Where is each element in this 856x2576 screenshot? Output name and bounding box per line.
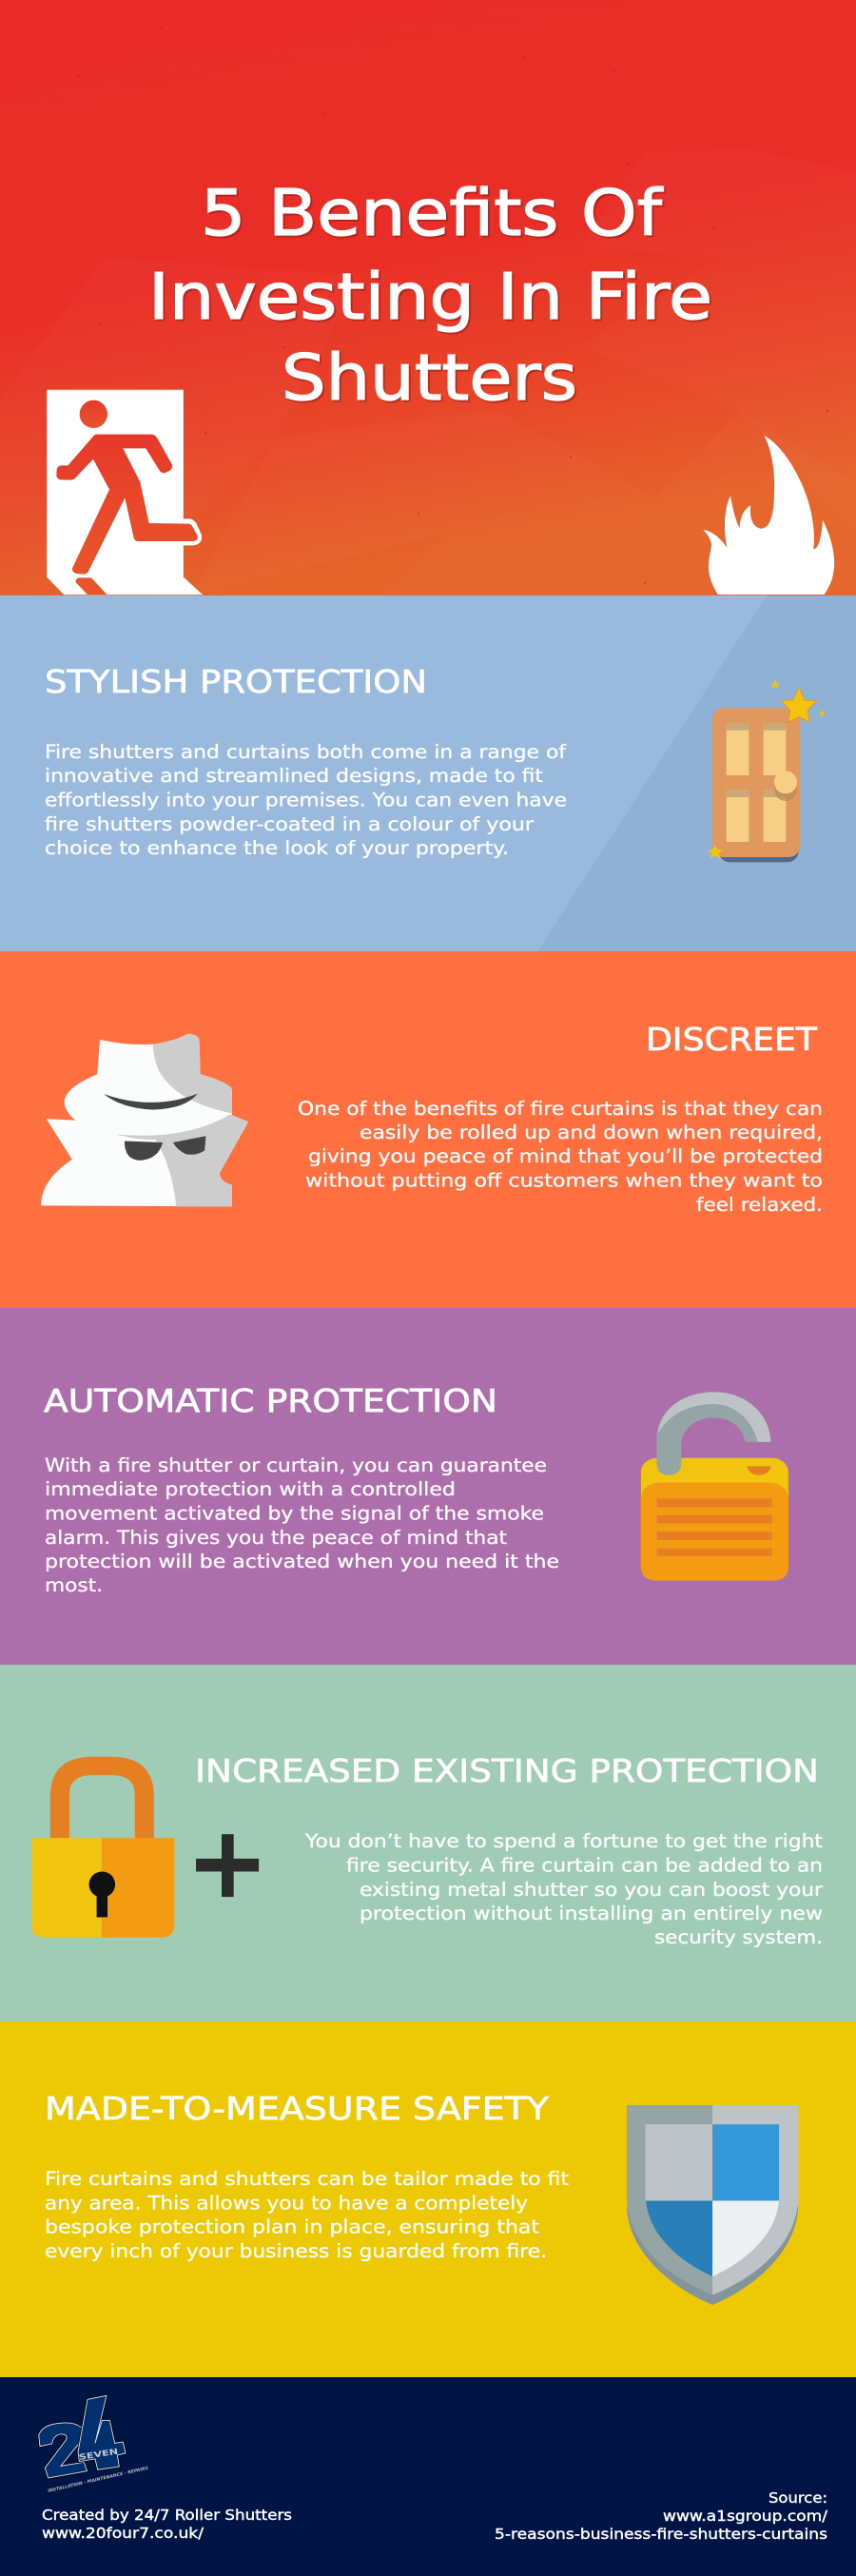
credit text (42, 2507, 292, 2542)
text block: made-to-measure safety: Fire curtains and shutters can be tailor made to fit (45, 2168, 569, 2190)
source text: www.a1sgroup.com/ (663, 2508, 828, 2525)
heading: made-to-measure safety: MADE-TO-MEASURE SAFETY (45, 2090, 550, 2127)
text block: increased existing protection: existing metal shutter so you can boost your (360, 1879, 824, 1901)
heading: stylish protection: STYLISH PROTECTION (45, 663, 427, 700)
text block: discreet: One of the benefits of fire curtains is that they can (298, 1098, 823, 1120)
credit text: Created by 24/7 Roller Shutters (42, 2507, 292, 2524)
text block: stylish protection (45, 741, 567, 859)
panel: header (0, 0, 856, 596)
text block: automatic protection: most. (45, 1574, 103, 1596)
text block: stylish protection: effortlessly into your premises. You can even have (45, 790, 567, 810)
text block: discreet: easily be rolled up and down when required, (360, 1122, 823, 1143)
text block: stylish protection: Fire shutters and curtains both come in a range of (45, 741, 567, 763)
text block: increased existing protection (304, 1830, 824, 1948)
icon: emergency exit door with running figure (47, 390, 203, 595)
title (148, 176, 712, 415)
text block: discreet: feel relaxed. (696, 1194, 823, 1216)
text block: increased existing protection: You don’t have to spend a fortune to get the right (304, 1830, 823, 1852)
text block: discreet (298, 1098, 823, 1216)
title: 5 Benefits Of (201, 176, 664, 250)
panel: automatic protection (0, 1308, 856, 1666)
source text: 5-reasons-business-fire-shutters-curtains (495, 2526, 827, 2543)
heading: increased existing protection: INCREASED EXISTING PROTECTION (195, 1752, 819, 1789)
panel: discreet (0, 951, 856, 1309)
text block: stylish protection: innovative and streamlined designs, made to fit (45, 765, 543, 787)
icon: shield (627, 2105, 798, 2305)
source text (495, 2489, 828, 2543)
icon: closed padlock (31, 1757, 174, 1938)
icon: plus sign (196, 1834, 259, 1897)
text block: automatic protection: alarm. This gives you the peace of mind that (45, 1527, 507, 1549)
icon: spy in hat and sunglasses (41, 1034, 248, 1206)
source text: Source: (768, 2489, 827, 2507)
text block: automatic protection: protection will be activated when you need it the (45, 1551, 559, 1572)
title: Shutters (282, 341, 577, 415)
logo: 24 Seven: SEVEN (78, 2447, 119, 2462)
text block: increased existing protection: protection without installing an entirely new (360, 1903, 823, 1924)
panel: footer (0, 2377, 856, 2576)
icon: door with stars (708, 679, 826, 862)
heading: automatic protection: AUTOMATIC PROTECTION (44, 1382, 497, 1419)
text block: stylish protection: choice to enhance the look of your property. (45, 837, 509, 859)
text block: stylish protection: fire shutters powder-coated in a colour of your (45, 813, 535, 835)
icon: flame (703, 436, 834, 595)
logo: 24 Seven (39, 2395, 149, 2494)
text block: automatic protection: immediate protection with a controlled (45, 1478, 456, 1500)
logo: 24 Seven: INSTALLATION - MAINTENANCE - REPAIRS (48, 2466, 149, 2494)
text block: increased existing protection: fire security. A fire curtain can be added to an (346, 1855, 823, 1876)
text block: made-to-measure safety: any area. This allows you to have a completely (45, 2192, 528, 2215)
panel: increased existing protection (0, 1665, 856, 2022)
text block: automatic protection (45, 1454, 559, 1596)
title: Investing In Fire (148, 260, 712, 334)
text block: automatic protection: With a fire shutter or curtain, you can guarantee (45, 1454, 547, 1476)
text block: discreet: giving you peace of mind that you’ll be protected (308, 1145, 823, 1167)
text block: made-to-measure safety (45, 2168, 569, 2262)
icon: open padlock (641, 1392, 788, 1581)
heading: discreet: DISCREET (646, 1021, 818, 1058)
credit text: www.20four7.co.uk/ (42, 2525, 204, 2542)
text block: made-to-measure safety: every inch of your business is guarded from fire. (45, 2240, 547, 2262)
panel: made-to-measure safety (0, 2021, 856, 2378)
text block: automatic protection: movement activated by the signal of the smoke (45, 1503, 544, 1524)
panel: stylish protection (0, 595, 856, 952)
text block: made-to-measure safety: bespoke protection plan in place, ensuring that (45, 2216, 539, 2237)
text block: discreet: without putting off customers when they want to (305, 1170, 823, 1191)
text block: increased existing protection: security system. (654, 1926, 823, 1948)
